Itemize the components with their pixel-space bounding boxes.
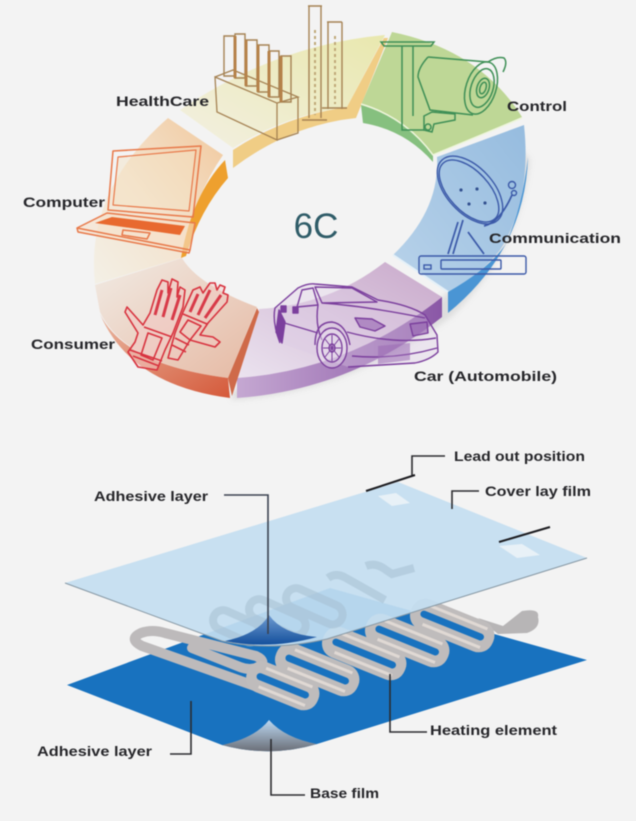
right glove bbox=[168, 283, 228, 360]
label: Adhesive layer (top): Adhesive layer bbox=[94, 489, 209, 504]
icon: security camera bbox=[381, 42, 506, 132]
label: Computer: Computer bbox=[23, 195, 106, 210]
segment: consumer bbox=[95, 258, 259, 398]
label: Control: Control bbox=[507, 99, 567, 114]
see-through ghost of the element bbox=[210, 565, 414, 646]
icon: laptop bbox=[77, 146, 201, 253]
left long strip bbox=[135, 631, 300, 702]
center label: 6C: 6C bbox=[294, 207, 338, 246]
segment: communication bbox=[393, 125, 528, 313]
label: Consumer: Consumer bbox=[31, 337, 116, 352]
label: Lead out position: Lead out position bbox=[454, 449, 585, 464]
icon: car bbox=[274, 284, 438, 368]
segment: car bbox=[237, 262, 442, 398]
label: Communication: Communication bbox=[489, 231, 621, 246]
icon: test tubes and cylinders bbox=[215, 6, 347, 140]
adhesive layer peel bbox=[225, 615, 317, 645]
lead tail bbox=[478, 610, 539, 634]
label: Cover lay film: Cover lay film bbox=[485, 484, 591, 499]
heater layer diagram bbox=[37, 449, 591, 801]
segment: computer bbox=[94, 118, 228, 284]
base film with adhesive layer bbox=[67, 588, 587, 751]
label: Heating element: Heating element bbox=[430, 723, 558, 738]
icon: satellite dish bbox=[419, 144, 526, 274]
base film curl bbox=[222, 720, 317, 751]
segment: healthcare bbox=[180, 35, 388, 168]
loops bbox=[242, 657, 324, 715]
6C ring diagram bbox=[23, 6, 621, 400]
heating element bbox=[135, 594, 539, 715]
ring shadow bbox=[232, 150, 530, 400]
label: Base film: Base film bbox=[310, 786, 379, 801]
film outline edges bbox=[65, 558, 587, 646]
label: HealthCare: HealthCare bbox=[116, 94, 210, 109]
segment: control bbox=[361, 32, 522, 162]
lead out slot bbox=[499, 544, 540, 558]
lead out slot bbox=[378, 493, 410, 506]
callout lines bbox=[170, 456, 479, 795]
icon: gloves bbox=[125, 279, 228, 370]
left glove bbox=[125, 279, 185, 370]
cover lay film bbox=[65, 482, 587, 646]
label: Car (Automobile): Car (Automobile) bbox=[414, 369, 557, 384]
label: Adhesive layer (bottom): Adhesive layer bbox=[37, 744, 153, 759]
lead wire marks bbox=[366, 475, 550, 542]
